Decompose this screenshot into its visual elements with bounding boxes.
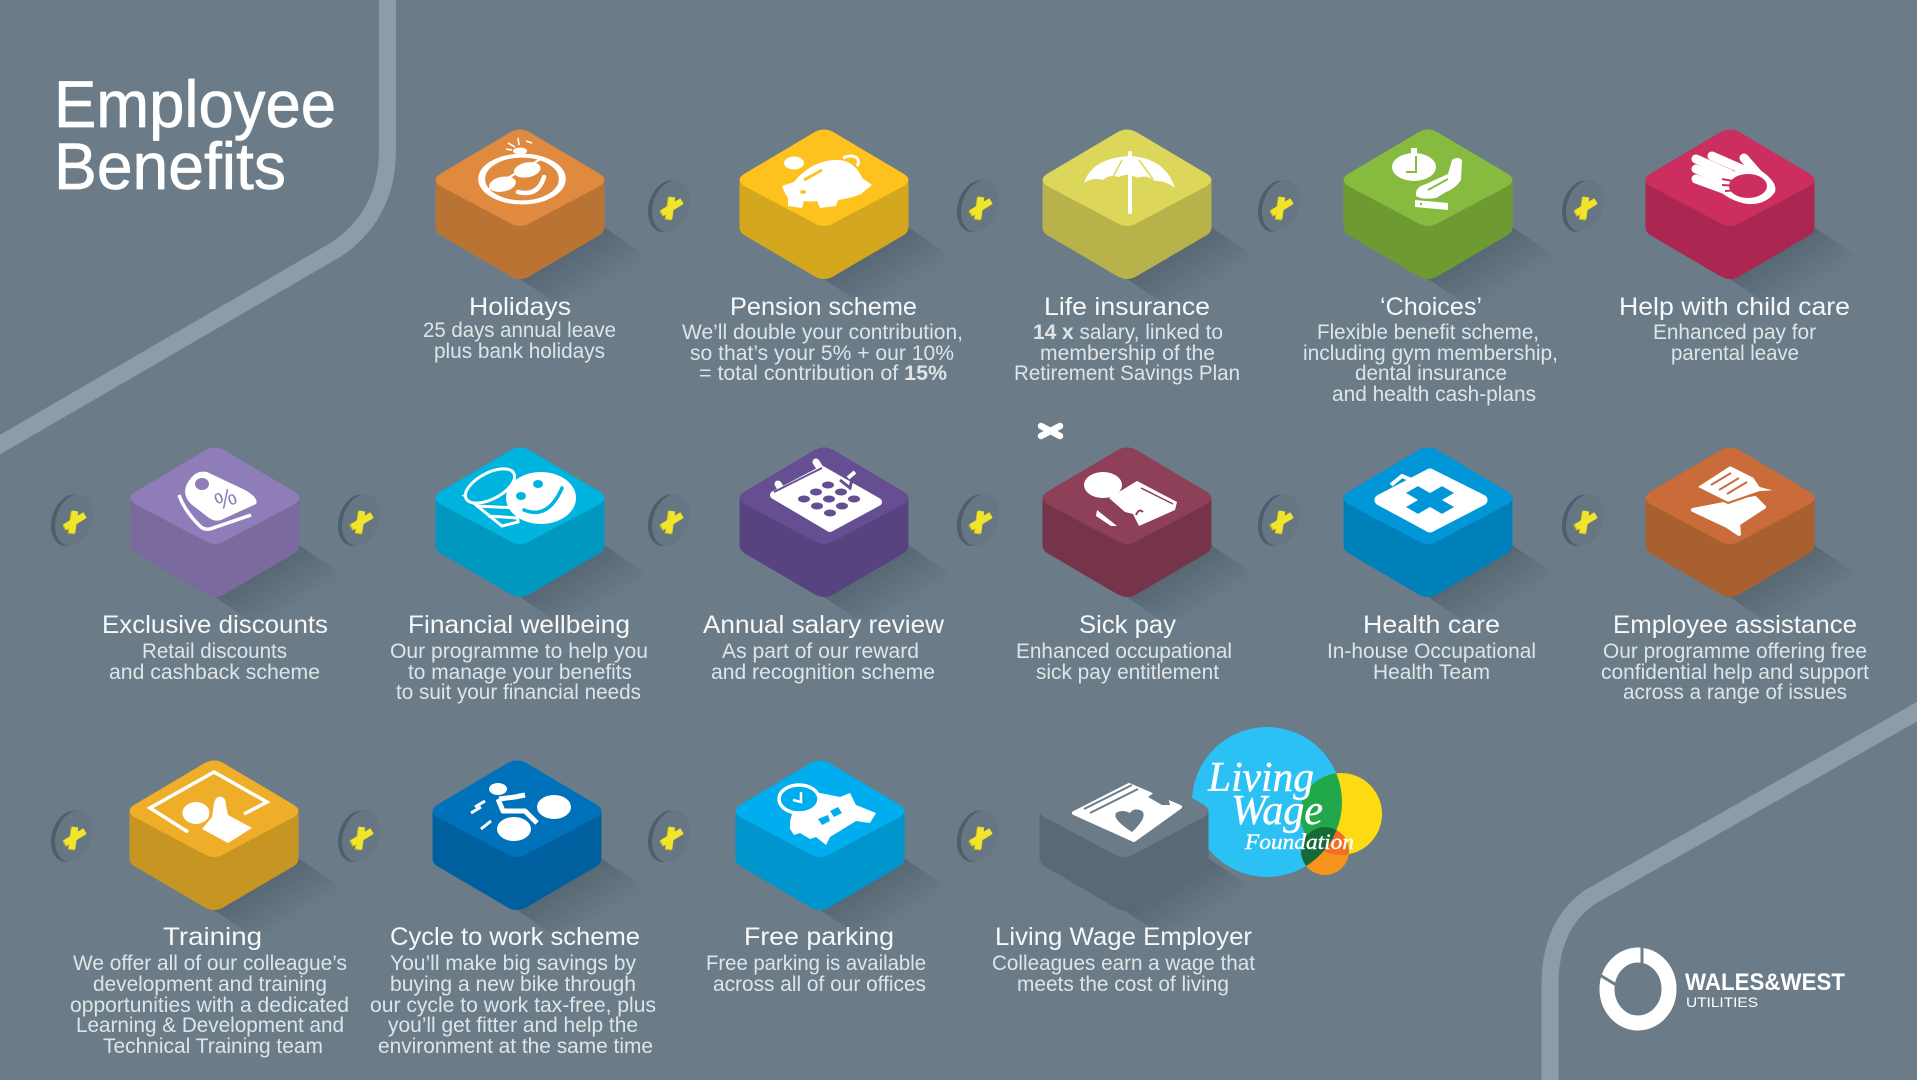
description: As part of our reward bbox=[722, 640, 919, 663]
icon: living wage cube bbox=[1040, 760, 1208, 910]
plus token row 2 bbox=[45, 489, 1610, 551]
description: across all of our offices bbox=[713, 973, 926, 996]
heading: Employee assistance bbox=[1613, 611, 1857, 639]
description: to manage your benefits bbox=[408, 661, 632, 684]
description bbox=[390, 640, 648, 704]
icon: discounts cube bbox=[130, 448, 346, 631]
benefit: Exclusive discounts bbox=[102, 448, 346, 684]
description: sick pay entitlement bbox=[1036, 661, 1219, 684]
heading: Training bbox=[163, 923, 262, 951]
benefit: Cycle to work scheme bbox=[370, 760, 656, 1058]
description: You’ll make big savings by bbox=[390, 952, 636, 975]
description: and cashback scheme bbox=[109, 661, 320, 684]
benefit: Health care bbox=[1327, 448, 1559, 684]
description: opportunities with a dedicated bbox=[70, 994, 349, 1017]
description bbox=[682, 321, 963, 385]
heading: ‘Choices’ bbox=[1380, 293, 1482, 321]
description: so that’s your 5% + our 10% bbox=[690, 342, 954, 365]
description: and health cash-plans bbox=[1332, 383, 1536, 406]
description bbox=[1303, 321, 1558, 406]
logo: Wales & West Utilities: UTILITIES bbox=[1686, 994, 1758, 1010]
description: development and training bbox=[93, 973, 327, 996]
description: We offer all of our colleague’s bbox=[73, 952, 347, 975]
description: Colleagues earn a wage that bbox=[992, 952, 1255, 975]
icon: training cube bbox=[130, 760, 345, 944]
icon: health care cube bbox=[1344, 448, 1559, 631]
description: dental insurance bbox=[1355, 362, 1507, 385]
description bbox=[706, 952, 926, 996]
description: parental leave bbox=[1671, 342, 1799, 365]
heading: Pension scheme bbox=[730, 293, 917, 321]
benefit: Life insurance bbox=[1014, 130, 1258, 385]
benefit: Help with child care bbox=[1619, 130, 1861, 365]
description bbox=[1327, 640, 1536, 684]
description: Flexible benefit scheme, bbox=[1317, 321, 1539, 344]
heading: Financial wellbeing bbox=[408, 611, 630, 639]
description: membership of the bbox=[1040, 342, 1215, 365]
heading: Help with child care bbox=[1619, 293, 1850, 321]
icon: pension cube bbox=[740, 130, 955, 313]
description: buying a new bike through bbox=[390, 973, 636, 996]
description: meets the cost of living bbox=[1017, 973, 1229, 996]
icon: white cross bbox=[1041, 426, 1060, 436]
description bbox=[370, 952, 656, 1058]
icon: cycle to work cube bbox=[432, 760, 648, 944]
logo: Wales & West Utilities: WALES&WEST bbox=[1685, 969, 1845, 996]
description: environment at the same time bbox=[378, 1035, 653, 1058]
benefit: Holidays bbox=[423, 130, 651, 363]
description: Retail discounts bbox=[142, 640, 287, 663]
heading: Sick pay bbox=[1079, 611, 1177, 639]
description: Technical Training team bbox=[103, 1035, 323, 1058]
icon: choices cube bbox=[1344, 130, 1559, 313]
logo: Wales & West Utilities bbox=[1598, 944, 1845, 1023]
description: Learning & Development and bbox=[76, 1014, 344, 1037]
description: 14 x salary, linked to bbox=[1033, 321, 1223, 344]
description bbox=[109, 640, 320, 684]
heading: Holidays bbox=[469, 293, 571, 321]
benefit: Employee assistance bbox=[1601, 448, 1869, 704]
description bbox=[423, 319, 616, 363]
description: Retirement Savings Plan bbox=[1014, 362, 1240, 385]
benefit: Living Wage Employer bbox=[992, 727, 1382, 996]
description: plus bank holidays bbox=[434, 340, 605, 363]
logo: Living Wage Foundation: Foundation bbox=[1244, 829, 1354, 854]
description: In-house Occupational bbox=[1327, 640, 1536, 663]
description bbox=[992, 952, 1255, 996]
benefit: Sick pay bbox=[1016, 448, 1258, 684]
description: = total contribution of 15% bbox=[699, 362, 947, 385]
benefit: Choices bbox=[1303, 130, 1559, 406]
description: confidential help and support bbox=[1601, 661, 1869, 684]
description: including gym membership, bbox=[1303, 342, 1558, 365]
title: Benefits bbox=[54, 129, 286, 203]
description: across a range of issues bbox=[1623, 681, 1847, 704]
description: Health Team bbox=[1373, 661, 1490, 684]
description bbox=[1653, 321, 1816, 365]
icon: sick pay cube bbox=[1042, 448, 1258, 631]
icon: holidays cube bbox=[436, 130, 651, 313]
title bbox=[54, 67, 336, 203]
logo: Living Wage Foundation: Wage bbox=[1231, 788, 1323, 834]
icon: employee assistance cube bbox=[1646, 448, 1861, 631]
description bbox=[1601, 640, 1869, 704]
benefit: Annual salary review bbox=[703, 448, 955, 684]
description: 25 days annual leave bbox=[423, 319, 616, 342]
heading: Cycle to work scheme bbox=[390, 923, 640, 951]
heading: Free parking bbox=[744, 923, 894, 951]
benefit: Training bbox=[70, 760, 349, 1058]
icon: discounts cube: % bbox=[211, 483, 241, 516]
icon: salary review cube bbox=[740, 448, 955, 631]
heading: Life insurance bbox=[1044, 293, 1210, 321]
description: We’ll double your contribution, bbox=[682, 321, 963, 344]
description bbox=[1016, 640, 1232, 684]
description bbox=[1014, 321, 1240, 385]
description: our cycle to work tax-free, plus bbox=[370, 994, 656, 1017]
description bbox=[70, 952, 349, 1058]
plus token row 3 bbox=[45, 805, 1005, 867]
benefit: Financial wellbeing bbox=[390, 448, 651, 704]
description: to suit your financial needs bbox=[396, 681, 641, 704]
icon: financial wellbeing cube bbox=[436, 448, 651, 631]
icon: free parking cube bbox=[736, 760, 951, 944]
benefit: Pension scheme bbox=[682, 130, 963, 385]
description: Enhanced occupational bbox=[1016, 640, 1232, 663]
heading: Health care bbox=[1363, 611, 1500, 639]
heading: Living Wage Employer bbox=[995, 923, 1252, 951]
description: Free parking is available bbox=[706, 952, 926, 975]
description bbox=[711, 640, 935, 684]
description: and recognition scheme bbox=[711, 661, 935, 684]
benefit: Free parking bbox=[706, 760, 951, 996]
icon: life insurance cube bbox=[1042, 130, 1258, 313]
description: Our programme offering free bbox=[1603, 640, 1867, 663]
description: Our programme to help you bbox=[390, 640, 648, 663]
logo: Living Wage Foundation: Living bbox=[1207, 755, 1314, 801]
heading: Exclusive discounts bbox=[102, 611, 328, 639]
title: Employee bbox=[54, 67, 336, 141]
description: you’ll get fitter and help the bbox=[388, 1014, 638, 1037]
description: Enhanced pay for bbox=[1653, 321, 1816, 344]
heading: Annual salary review bbox=[703, 611, 945, 639]
logo: Living Wage Foundation bbox=[1192, 727, 1382, 877]
icon: child care cube bbox=[1646, 130, 1861, 313]
plus token row 1 bbox=[642, 175, 1610, 237]
